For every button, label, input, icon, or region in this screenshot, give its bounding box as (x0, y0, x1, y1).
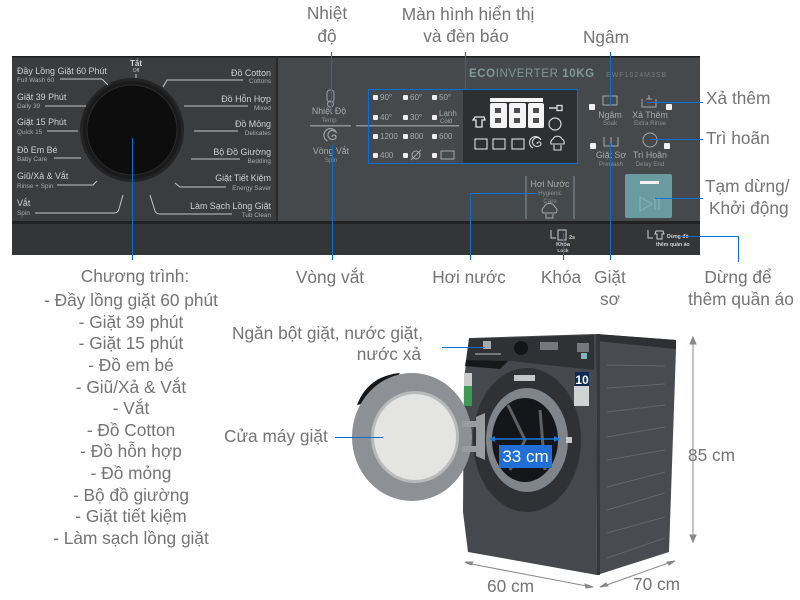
hygienic care steam (526, 176, 574, 219)
option grid: 90° (380, 93, 392, 102)
lock and add clothes marks (551, 230, 690, 254)
program list: - Giặt 15 phút (79, 333, 184, 353)
start pause button (625, 174, 672, 218)
top labels: Ngâm (583, 27, 629, 47)
program labels right: Energy Saver (232, 185, 272, 192)
program dial: Tắt (130, 59, 142, 68)
program labels right: Tub Clean (242, 212, 271, 219)
program labels left: Full Wash 60 (17, 77, 55, 84)
washer labels: Cửa máy giặt (224, 426, 328, 446)
33 cm dimension: 33 cm (502, 447, 549, 466)
program labels right: Mixed (254, 105, 271, 112)
right option buttons: Giặt Sơ (596, 150, 626, 160)
control panel (12, 56, 700, 255)
option grid: Cold (440, 119, 452, 125)
program labels left: Daily 39 (17, 103, 41, 110)
program labels right: Đồ Hỗn Hợp (221, 94, 271, 104)
program labels left: Đồ Em Bé (17, 145, 58, 155)
33 cm dimension (489, 436, 560, 468)
brand text: ECOINVERTER 10KG (469, 68, 595, 80)
program dial: Off (133, 68, 140, 74)
open door (352, 373, 485, 501)
program list: - Đầy lồng giặt 60 phút (44, 290, 218, 310)
program labels left (17, 66, 123, 217)
program list: - Đồ Cotton (87, 420, 175, 440)
bottom labels: thêm quần áo (688, 289, 794, 309)
hygienic care steam: Hygienic (538, 190, 562, 197)
washer labels: Ngăn bột giặt, nước giặt, (232, 323, 423, 343)
program labels right: Bedding (248, 158, 271, 165)
program list: - Vắt (113, 398, 149, 418)
program labels left: Rinse + Spin (17, 183, 54, 190)
door frame opening (473, 368, 581, 512)
program labels right: Làm Sạch Lồng Giặt (190, 201, 272, 211)
program labels right: Bộ Đồ Giường (213, 147, 271, 157)
temperature and spin buttons: Spin (325, 157, 338, 164)
bottom labels: Vòng vắt (296, 267, 364, 287)
dimension labels (487, 445, 735, 596)
program labels right (150, 68, 272, 219)
program labels left: Giặt 39 Phút (17, 92, 67, 102)
detergent drawer and top controls (466, 335, 594, 370)
option grid: 800 (410, 132, 424, 141)
program labels right: Giặt Tiết Kiệm (215, 173, 271, 183)
right option buttons: Xả Thêm (632, 110, 668, 120)
dimension arrows (465, 337, 696, 588)
lock and add clothes marks: Dừng đồ (667, 234, 689, 240)
option grid: 30° (410, 113, 422, 122)
program labels left: Baby Care (17, 156, 48, 163)
right option buttons: Extra Rinse (634, 120, 667, 127)
program list: - Bộ đồ giường (73, 485, 189, 505)
bottom labels: Dừng để (704, 267, 772, 287)
lock and add clothes marks: Lock (557, 248, 569, 254)
dimension labels: 70 cm (633, 574, 680, 594)
program list: - Đồ hỗn hợp (80, 441, 182, 461)
option grid: Lạnh (439, 109, 457, 118)
option grid (373, 93, 457, 160)
program list: - Làm sạch lồng giặt (53, 528, 209, 548)
top labels: và đèn báo (423, 26, 509, 46)
program list: - Đồ mỏng (91, 463, 171, 483)
washer labels: nước xả (357, 344, 421, 364)
lock and add clothes marks: thêm quần áo (656, 242, 690, 248)
brand text: EWF1024M3SB (606, 72, 667, 79)
washer labels (224, 323, 423, 446)
program list: - Đồ em bé (88, 355, 174, 375)
brand text (469, 68, 667, 80)
energy label stickers: 10 (575, 373, 589, 387)
top labels: độ (317, 26, 337, 46)
option grid: 60° (410, 93, 422, 102)
program labels right: Đồ Mỏng (235, 119, 271, 129)
program dial (80, 59, 184, 182)
bottom labels: sơ (600, 289, 620, 309)
program labels left: Giặt 15 Phút (17, 117, 67, 127)
right labels (705, 88, 790, 218)
program labels right: Cottons (249, 78, 271, 85)
bottom labels: Khóa (541, 267, 582, 287)
program labels left: Giũ/Xả & Vắt (17, 171, 69, 181)
dimension labels: 60 cm (487, 576, 534, 596)
program labels right: Đồ Cotton (231, 68, 271, 78)
temperature and spin buttons: Nhiệt Độ (312, 106, 346, 116)
LED display (463, 90, 577, 163)
right labels: Xả thêm (706, 88, 770, 108)
energy label stickers (464, 372, 589, 443)
right option buttons: Delay End (636, 161, 665, 168)
program labels left: Quick 15 (17, 129, 43, 136)
right labels: Trì hoãn (706, 128, 770, 148)
hygienic care steam: Hơi Nước (531, 179, 570, 189)
top labels: Nhiệt (307, 3, 347, 23)
program labels left: Vắt (17, 198, 31, 208)
temperature and spin buttons: Temp (321, 117, 337, 124)
program list: - Giũ/Xả & Vắt (76, 377, 186, 397)
blue leader lines (132, 52, 738, 438)
option grid: 1200 (380, 132, 398, 141)
program list: - Giặt tiết kiệm (75, 506, 187, 526)
dimension labels: 85 cm (688, 445, 735, 465)
washer body (596, 334, 676, 575)
right option buttons: Soak (603, 120, 618, 127)
top labels: Màn hình hiển thị (402, 4, 534, 24)
right option buttons (589, 95, 672, 168)
right labels: Tạm dừng/ (705, 176, 790, 196)
lock and add clothes marks: Khóa (556, 242, 571, 248)
right option buttons: Prewash (599, 161, 624, 168)
hygienic care steam: Care (543, 198, 557, 205)
program labels left: Đầy Lồng Giặt 60 Phút (17, 66, 107, 76)
washing machine (352, 334, 676, 575)
option grid: 40° (380, 113, 392, 122)
temperature and spin buttons: Vòng Vắt (313, 146, 350, 156)
program labels right: Delicates (245, 130, 271, 137)
program list: Chương trình: (81, 266, 189, 286)
program labels left: Spin (17, 210, 30, 217)
program list: - Giặt 39 phút (79, 312, 184, 332)
right option buttons: Ngâm (598, 110, 622, 120)
lock and add clothes marks: 2s (569, 235, 575, 241)
top labels (307, 3, 629, 47)
bottom labels: Giặt (594, 267, 626, 287)
bottom labels: Hơi nước (432, 267, 506, 287)
option grid: 50° (439, 93, 451, 102)
bottom labels (296, 267, 794, 309)
program list (44, 266, 218, 548)
option grid: 600 (439, 132, 453, 141)
option grid: 400 (380, 151, 394, 160)
right option buttons: Trì Hoãn (633, 150, 667, 160)
temperature and spin buttons (310, 90, 459, 164)
right labels: Khởi động (709, 198, 789, 218)
